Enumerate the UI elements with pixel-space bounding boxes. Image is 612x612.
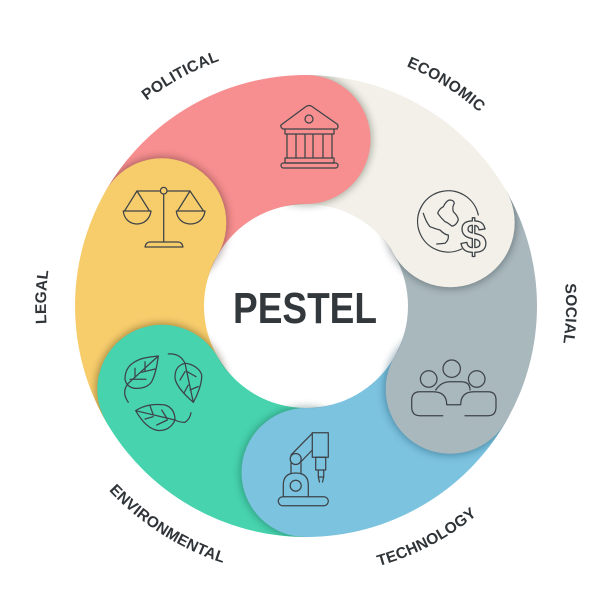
lobe: political [280, 75, 377, 210]
icon glyph: dollar sign: $ [460, 210, 487, 263]
icon: robot arm [278, 433, 328, 506]
band: political [106, 75, 306, 255]
icon: balance scale [123, 187, 205, 247]
band: environmental [106, 357, 306, 537]
lobe: social [384, 323, 516, 455]
label: political: POLITICAL [141, 52, 219, 100]
label: legal: LEGAL [35, 270, 48, 324]
band: social [394, 190, 537, 422]
ring bands [75, 75, 537, 537]
label: technology: TECHNOLOGY [376, 506, 474, 565]
label: economic: ECONOMIC [407, 56, 484, 110]
band: economic [306, 75, 506, 255]
lobe: technology [236, 402, 329, 537]
icon: bank building [281, 106, 338, 168]
label: environmental: ENVIRONMENTAL [110, 484, 223, 563]
center title: PESTEL [233, 284, 377, 333]
icon: three recycling leaves [125, 354, 202, 431]
band: technology [306, 357, 506, 537]
lobe: economic [380, 190, 520, 293]
band: legal [75, 190, 218, 422]
icon: group of people [412, 360, 496, 416]
lobe: legal [96, 157, 228, 289]
label: social: SOCIAL [563, 284, 577, 343]
lobe: environmental [96, 323, 228, 455]
